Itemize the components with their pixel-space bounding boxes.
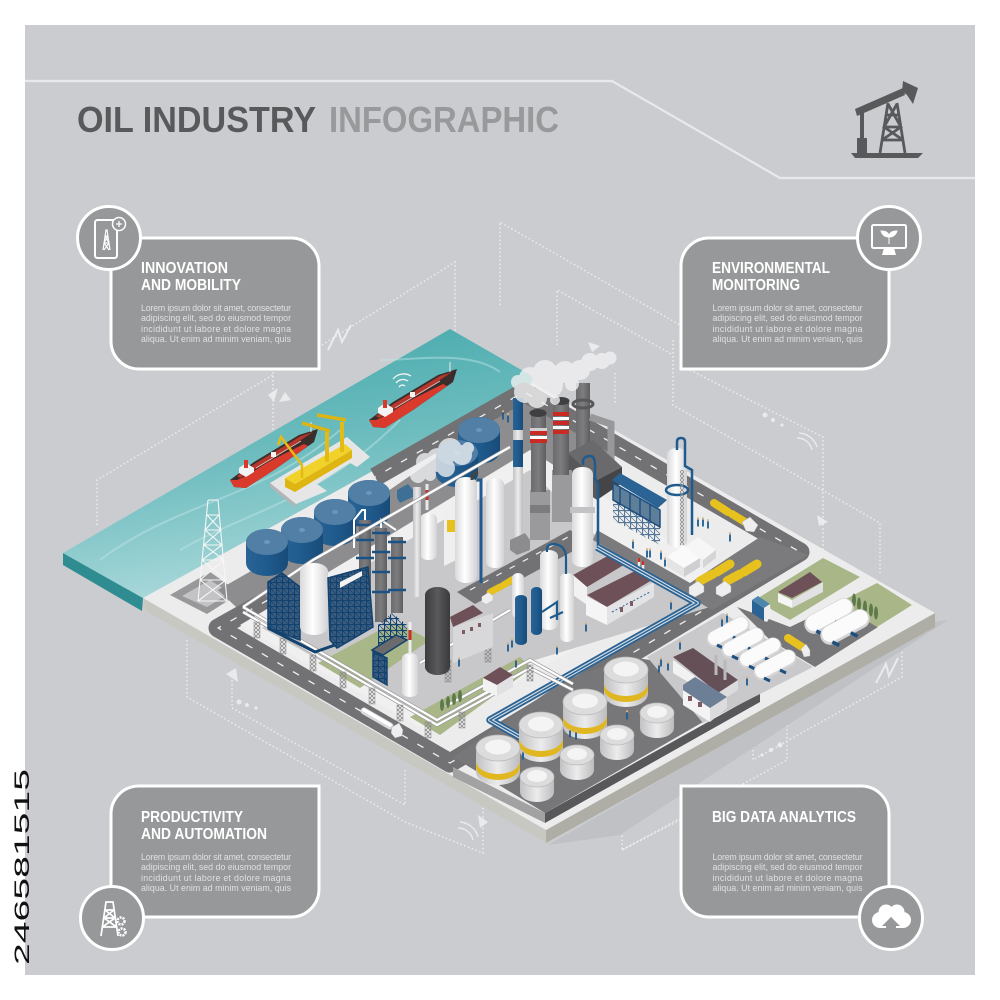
dotted connector boxes — [97, 222, 902, 853]
tank farm pad — [453, 613, 813, 823]
oil tanker, docked — [230, 422, 318, 488]
panel: productivity and automation: PRODUCTIVITY — [141, 809, 243, 826]
back grey stack and dark cube — [568, 383, 622, 500]
substation boxes — [667, 537, 716, 577]
icon: monitor with sprout — [858, 206, 920, 270]
left blue steel frame unit — [268, 563, 373, 652]
title: OIL INDUSTRY — [77, 99, 316, 140]
panel: innovation and mobility: incididunt ut labore et dolore magna — [141, 324, 291, 334]
panel: environmental monitoring: MONITORING — [712, 277, 800, 294]
process building — [450, 605, 513, 696]
panel: innovation and mobility: Lorem ipsum dolor sit amet, consectetur — [141, 303, 291, 313]
white process columns, rear — [444, 456, 598, 583]
service lot and green patches — [737, 558, 912, 667]
vertical stock id: 246581515 — [11, 769, 34, 965]
network glyphs: arrows, wifi, dots, zigzags — [226, 325, 898, 840]
warehouses — [573, 553, 654, 625]
panel: productivity and automation: AND AUTOMATION — [141, 826, 267, 843]
tank farm storage tanks — [476, 657, 674, 802]
platform shadow — [548, 620, 948, 845]
panel: innovation and mobility — [111, 238, 319, 369]
panel: productivity and automation: adipiscing elit, sed do eiusmod tempor — [141, 862, 291, 872]
header divider line — [25, 81, 975, 178]
tree row — [440, 690, 462, 711]
icon: mobile phone with derrick — [78, 206, 140, 270]
panel: innovation and mobility: AND MOBILITY — [141, 277, 241, 294]
white process pipes — [243, 447, 573, 725]
panel: productivity and automation — [111, 786, 319, 917]
icon: derrick with gears — [80, 886, 144, 950]
wifi signal on tanker — [393, 374, 411, 387]
panel: productivity and automation: Lorem ipsum dolor sit amet, consectetur — [141, 852, 291, 862]
panel: innovation and mobility: adipiscing elit, sed do eiusmod tempor — [141, 313, 291, 323]
panel: big data analytics: BIG DATA ANALYTICS — [712, 809, 856, 826]
title: INFOGRAPHIC — [329, 99, 559, 140]
yellow tanker trucks on road — [482, 564, 757, 604]
black storage vessel — [425, 587, 450, 675]
blue process columns and vessels — [512, 544, 574, 645]
panel: innovation and mobility: aliqua. Ut enim ad minim veniam, quis — [141, 334, 292, 344]
pier and loading cranes — [270, 437, 370, 508]
platform base — [143, 383, 935, 843]
small factory — [673, 648, 738, 722]
chimneys — [510, 397, 572, 555]
panel: big data analytics: incididunt ut labore et dolore magna — [712, 873, 863, 883]
title — [77, 99, 559, 140]
smoke plume, flare stack — [410, 438, 474, 483]
panel: environmental monitoring — [681, 238, 889, 369]
tall white tower with blue ring — [666, 438, 692, 548]
green lot trees — [852, 594, 878, 620]
blue lattice unit with flare — [372, 613, 418, 697]
refinery ground — [240, 450, 808, 735]
workers — [458, 410, 748, 760]
blue triple process pipe — [490, 547, 697, 737]
panel: environmental monitoring: incididunt ut labore et dolore magna — [712, 324, 863, 334]
blue crude tanks — [246, 417, 500, 576]
icon: oil pump jack — [851, 81, 923, 158]
oil tanker, at sea — [369, 362, 457, 428]
lot tanker truck — [788, 638, 810, 657]
panel: environmental monitoring: adipiscing elit, sed do eiusmod tempor — [712, 313, 863, 323]
panel: environmental monitoring: aliqua. Ut enim ad minim veniam, quis — [712, 334, 863, 344]
blue delivery trucks — [397, 484, 771, 622]
panel: environmental monitoring: Lorem ipsum dolor sit amet, consectetur — [712, 303, 863, 313]
blue control building — [612, 473, 667, 545]
panel: environmental monitoring: ENVIRONMENTAL — [712, 260, 830, 277]
panel: big data analytics: Lorem ipsum dolor sit amet, consectetur — [712, 852, 863, 862]
upper right yellow tanker truck — [714, 503, 758, 532]
panel: big data analytics: adipiscing elit, sed do eiusmod tempor — [712, 862, 863, 872]
derrick pad and shore ground — [170, 400, 610, 660]
icon: cloud upload — [860, 886, 922, 950]
distillation columns — [354, 484, 437, 622]
panel: big data analytics — [681, 786, 889, 917]
panel: productivity and automation: incididunt ut labore et dolore magna — [141, 873, 291, 883]
water slab — [63, 329, 532, 611]
yellow loading dock — [278, 415, 352, 492]
panel: productivity and automation: aliqua. Ut enim ad minim veniam, quis — [141, 883, 292, 893]
horizontal pressure tanks — [715, 607, 860, 681]
panel: big data analytics: aliqua. Ut enim ad minim veniam, quis — [712, 883, 863, 893]
white road tanker — [364, 710, 403, 738]
derrick tower — [198, 500, 227, 601]
panel: innovation and mobility: INNOVATION — [141, 260, 228, 277]
smoke plume, main chimneys — [511, 352, 616, 408]
road loop — [218, 392, 800, 763]
pipe rack supports — [254, 622, 533, 738]
small warehouse on green — [778, 572, 823, 608]
